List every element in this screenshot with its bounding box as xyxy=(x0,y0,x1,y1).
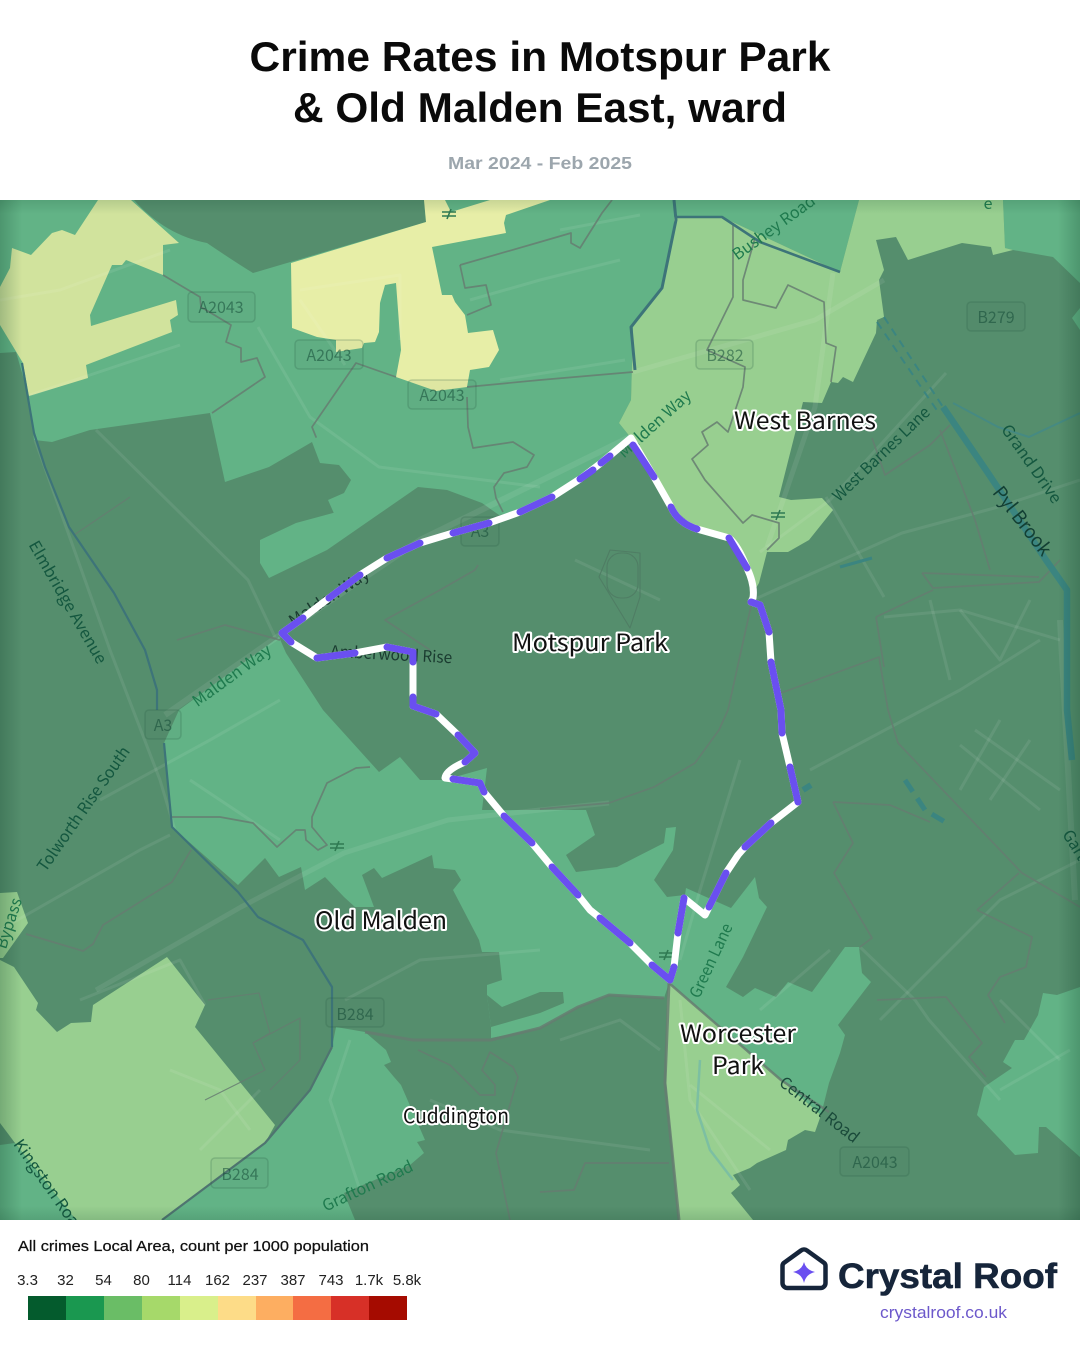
road number badges: A3 xyxy=(471,518,489,542)
region: east edge medium sliver xyxy=(1072,308,1080,330)
road name labels: e xyxy=(984,190,993,214)
road name labels: Grand Drive xyxy=(997,418,1069,508)
road network xyxy=(0,215,1080,1190)
icon: house outline xyxy=(782,1250,826,1288)
region: north-west medium band xyxy=(0,200,680,578)
road number badges: B284 xyxy=(336,1001,374,1025)
road name labels: Bushey Road xyxy=(726,188,820,265)
place labels: West Barnes xyxy=(734,401,876,436)
region: West Barnes light green xyxy=(619,200,1013,593)
title: Crime Rates in Motspur Park xyxy=(250,33,831,80)
region: south-west light green xyxy=(0,957,275,1220)
region: top dark block xyxy=(134,200,426,273)
region: south-east medium xyxy=(977,987,1080,1157)
road number badges: A2043 xyxy=(419,382,465,406)
region: Old Malden medium xyxy=(164,637,871,1115)
place labels: Worcester xyxy=(680,1014,797,1049)
rail station icons xyxy=(330,209,785,960)
legend scale values: 162 xyxy=(205,1272,230,1289)
legend scale values: 54 xyxy=(95,1272,112,1289)
road number badges: B284 xyxy=(221,1161,259,1185)
region: Cuddington medium xyxy=(162,1027,425,1220)
road number badges: A3 xyxy=(154,712,172,736)
route white base xyxy=(282,438,798,980)
legend scale values: 5.8k xyxy=(393,1272,422,1289)
choropleth map xyxy=(0,188,1080,1239)
road name labels: Kingston Road xyxy=(9,1133,93,1239)
title xyxy=(250,33,831,131)
region: south-west corner medium xyxy=(0,1143,76,1220)
region: north-east medium xyxy=(674,200,859,272)
road number badges xyxy=(145,292,1025,1188)
region: Worcester Park light green xyxy=(666,983,821,1220)
road name labels: Elmbridge Avenue xyxy=(24,535,114,668)
legend scale values xyxy=(17,1272,422,1289)
legend scale values: 1.7k xyxy=(355,1272,384,1289)
title: & Old Malden East, ward xyxy=(293,84,787,131)
place labels: Motspur Park xyxy=(512,623,668,658)
road name labels: Malden Way xyxy=(611,383,696,462)
icon: purple star xyxy=(793,1262,815,1283)
road name labels xyxy=(0,188,1080,1239)
dark crime band base xyxy=(0,200,1080,1220)
road name labels: Pyl Brook xyxy=(987,480,1059,561)
water courses xyxy=(22,200,1080,1220)
road name labels: Amberwood Rise xyxy=(330,638,453,668)
legend scale values: 3.3 xyxy=(17,1272,38,1289)
legend xyxy=(17,1238,422,1320)
legend scale values: 387 xyxy=(280,1272,306,1289)
brand logo xyxy=(782,1250,1057,1322)
road number badges: A2043 xyxy=(852,1149,898,1173)
legend colour ramp xyxy=(28,1296,407,1320)
website url: crystalroof.co.uk xyxy=(880,1304,1008,1322)
road name labels: Malden Way xyxy=(186,637,276,711)
road number badges: A2043 xyxy=(198,294,244,318)
legend scale values: 32 xyxy=(57,1272,74,1289)
legend scale values: 114 xyxy=(168,1272,191,1289)
region: top-left yellow xyxy=(0,200,179,396)
road name labels: Central Road xyxy=(775,1069,866,1147)
place labels: Cuddington xyxy=(403,1100,509,1129)
ward and borough boundaries xyxy=(26,200,1080,1220)
place labels xyxy=(315,401,876,1129)
road number badges: B279 xyxy=(977,304,1015,328)
road name labels: Malden Way xyxy=(283,561,374,631)
road number badges: B282 xyxy=(706,342,744,366)
legend title: All crimes Local Area, count per 1000 population xyxy=(18,1238,369,1255)
map edge vignette xyxy=(0,200,1080,1220)
road name labels: Grafton Road xyxy=(318,1153,417,1216)
region: top-centre yellow xyxy=(291,200,550,391)
wordmark: Crystal Roof xyxy=(838,1257,1057,1296)
legend scale values: 80 xyxy=(133,1272,150,1289)
route purple dashes xyxy=(282,445,798,980)
date range subtitle: Mar 2024 - Feb 2025 xyxy=(448,153,632,173)
road number badges: A2043 xyxy=(306,342,352,366)
region: bypass light sliver xyxy=(0,892,28,958)
road name labels: West Barnes Lane xyxy=(826,400,935,506)
place labels: Park xyxy=(712,1046,764,1081)
road name labels: Tolworth Rise South xyxy=(30,740,135,875)
road name labels: Green Lane xyxy=(682,919,737,1001)
region: far north-east medium xyxy=(1003,200,1080,283)
ward boundary route xyxy=(282,438,798,980)
legend scale values: 237 xyxy=(242,1272,268,1289)
legend scale values: 743 xyxy=(318,1272,344,1289)
place labels: Old Malden xyxy=(315,901,447,936)
region: small dark patch xyxy=(487,992,564,1027)
